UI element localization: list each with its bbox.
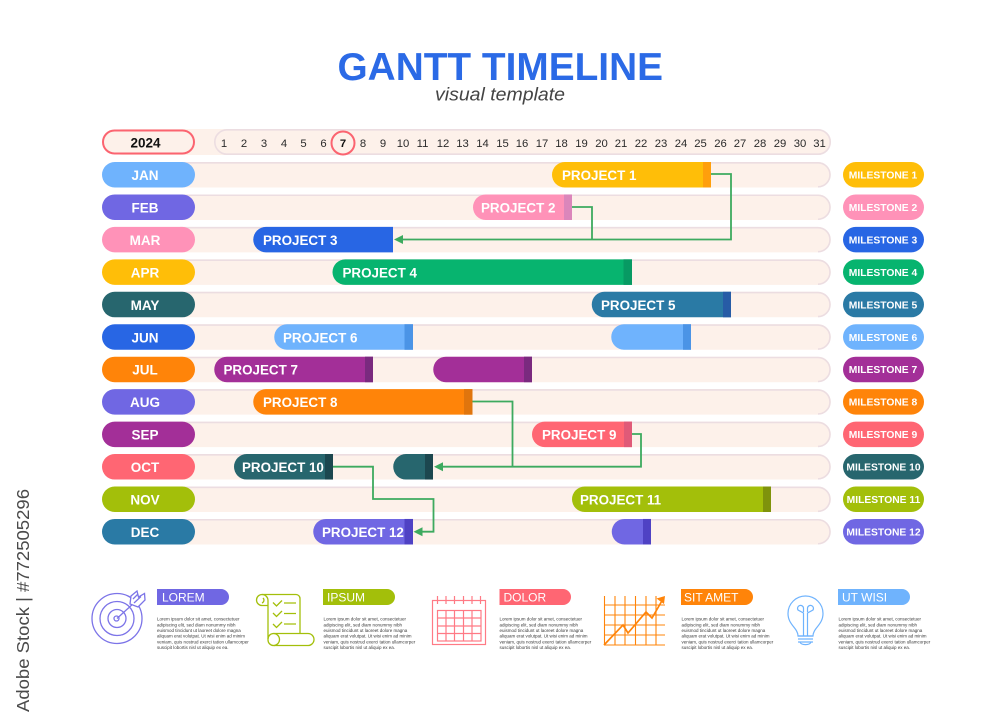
bar: project 12 second phase xyxy=(612,519,651,544)
milestone 8 xyxy=(843,389,924,415)
legend item: Ut Wisi xyxy=(788,589,931,650)
body text: Lorem ipsum dolor sit amet, consectetuer xyxy=(500,617,583,622)
milestone 2 xyxy=(843,194,924,220)
label: LOREM xyxy=(157,589,229,605)
body text: suscipit lobortis nisl ut aliquip ex ea. xyxy=(500,645,571,650)
milestone 6 xyxy=(843,324,924,350)
day scale: 23 xyxy=(655,138,667,150)
row: January xyxy=(102,162,924,188)
body text: adipiscing elit, sed diam nonummy nibh xyxy=(157,622,236,627)
day scale: 14 xyxy=(476,138,489,150)
body text: adipiscing elit, sed diam nonummy nibh xyxy=(500,622,579,627)
day scale: 30 xyxy=(794,138,806,150)
row: June xyxy=(102,324,924,350)
month: OCT xyxy=(102,454,195,480)
legend item: Sit Amet xyxy=(604,589,774,650)
milestone 7: MILESTONE 7 xyxy=(849,365,918,376)
milestone 9 xyxy=(843,422,924,447)
day scale: 24 xyxy=(675,138,687,150)
vertical stock credit: Adobe Stock | #772505296 xyxy=(13,489,33,712)
bar: project 6 second phase xyxy=(611,324,691,350)
day scale: 15 xyxy=(496,138,509,150)
body text: euismod tincidunt ut laoreet dolore magna xyxy=(838,628,923,633)
month: MAY xyxy=(102,292,195,317)
day scale: 10 xyxy=(397,138,409,150)
bar: project 6: PROJECT 6 xyxy=(283,330,357,345)
label: IPSUM xyxy=(323,589,395,605)
bar: project 5 xyxy=(592,292,731,317)
row: February xyxy=(102,194,924,220)
bar: project 7: PROJECT 7 xyxy=(224,363,298,378)
year pill xyxy=(103,130,194,154)
body text: aliquam erat volutpat. Ut wisi enim ad minim xyxy=(324,634,412,639)
title: GANTT TIMELINE xyxy=(338,46,663,89)
bar: project 7 xyxy=(214,357,373,382)
bar: project 10 xyxy=(234,454,333,480)
today marker xyxy=(332,132,354,154)
month: MAR: MAR xyxy=(130,233,161,248)
year pill: 2024 xyxy=(130,136,161,150)
milestone 6: MILESTONE 6 xyxy=(849,333,918,344)
body text: suscipit lobortis nisl ut aliquip ex ea. xyxy=(682,645,753,650)
month: FEB xyxy=(102,194,195,220)
month: APR: APR xyxy=(131,265,159,280)
legend item: Ipsum xyxy=(256,589,416,650)
month: JAN: JAN xyxy=(131,168,159,183)
milestone 12 xyxy=(843,519,924,544)
bar: project 9: PROJECT 9 xyxy=(542,428,616,443)
day scale: 5 xyxy=(300,138,307,150)
month: SEP xyxy=(102,422,195,447)
body text: euismod tincidunt ut laoreet dolore magna xyxy=(157,628,241,633)
icon: growth chart xyxy=(604,596,665,645)
row: May xyxy=(102,292,924,317)
body text: veniam, quis nostrud exerci tation ullamcorper xyxy=(324,639,416,644)
day scale xyxy=(215,130,830,154)
milestone 2: MILESTONE 2 xyxy=(849,203,918,214)
row: October xyxy=(102,454,924,480)
bar: project 1 xyxy=(552,162,711,188)
day scale: 13 xyxy=(456,138,469,150)
row: August xyxy=(102,389,924,415)
body text: adipiscing elit, sed diam nonummy nibh xyxy=(838,622,918,627)
body text: veniam, quis nostrud exerci tation ullamcorper xyxy=(157,639,249,644)
milestone 7 xyxy=(843,357,924,382)
month: DEC: DEC xyxy=(131,525,159,540)
body text: euismod tincidunt ut laoreet dolore magna xyxy=(324,628,408,633)
row: December xyxy=(102,519,924,544)
month: AUG xyxy=(102,389,195,415)
body text: adipiscing elit, sed diam nonummy nibh xyxy=(682,622,761,627)
body text: Lorem ipsum dolor sit amet, consectetuer xyxy=(838,617,922,622)
milestone 12: MILESTONE 12 xyxy=(846,527,921,538)
bar: project 10 second phase xyxy=(393,454,433,480)
day scale: 8 xyxy=(360,138,366,150)
body text: suscipit lobortis nisl ut aliquip ex ea. xyxy=(838,645,910,650)
subtitle: visual template xyxy=(435,84,565,104)
milestone 1 xyxy=(843,162,924,188)
day scale: 9 xyxy=(380,138,386,150)
bar: project 8 xyxy=(253,389,472,415)
arrow: project 8 joins project 10 line xyxy=(472,402,512,466)
milestone 10: MILESTONE 10 xyxy=(846,463,921,474)
body text: suscipit lobortis nisl ut aliquip ex ea. xyxy=(157,645,229,650)
milestone 1: MILESTONE 1 xyxy=(849,170,918,182)
month: JUN xyxy=(102,324,195,350)
bar: project 4 xyxy=(332,259,632,285)
day scale: 19 xyxy=(575,138,588,150)
day scale: 17 xyxy=(536,138,548,150)
bar: project 3: PROJECT 3 xyxy=(263,233,337,248)
label: DOLOR: DOLOR xyxy=(504,590,547,604)
bar: project 8: PROJECT 8 xyxy=(263,395,338,410)
month: JUN: JUN xyxy=(131,330,159,345)
day scale: 16 xyxy=(516,138,528,150)
day scale: 22 xyxy=(635,138,647,150)
day scale: 3 xyxy=(261,138,267,150)
milestone 3 xyxy=(843,227,924,252)
day scale: 7 xyxy=(340,138,346,150)
day scale: 25 xyxy=(694,138,707,150)
body text: euismod tincidunt ut laoreet dolore magna xyxy=(500,628,584,633)
day scale: 21 xyxy=(615,138,627,150)
bar: project 12: PROJECT 12 xyxy=(322,525,404,540)
month: JAN xyxy=(102,162,195,188)
row: March xyxy=(102,227,924,252)
label: UT WISI: UT WISI xyxy=(842,590,887,604)
icon: light bulb xyxy=(788,596,823,645)
month: DEC xyxy=(102,519,195,544)
month: APR xyxy=(102,259,195,285)
bar: project 6 xyxy=(274,324,413,350)
month: NOV xyxy=(102,486,195,512)
row: November xyxy=(102,486,924,512)
day scale: 11 xyxy=(417,138,428,150)
day scale: 2 xyxy=(241,138,247,150)
body text: aliquam erat volutpat. Ut wisi enim ad minim xyxy=(157,634,245,639)
bar: project 11 xyxy=(572,486,771,512)
day scale: 1 xyxy=(221,138,227,150)
month: JUL: JUL xyxy=(132,363,158,378)
bar: project 2: PROJECT 2 xyxy=(481,200,555,215)
milestone 10 xyxy=(843,454,924,480)
bar: project 7 second phase xyxy=(433,357,532,382)
body text: veniam, quis nostrud exerci tation ullamcorper xyxy=(682,639,774,644)
day scale: 4 xyxy=(281,138,287,150)
body text: veniam, quis nostrud exerci tation ullamcorper xyxy=(500,639,592,644)
label: SIT AMET xyxy=(681,589,753,605)
month: MAY: MAY xyxy=(131,298,159,313)
icon: target with arrow xyxy=(92,591,145,644)
body text: Lorem ipsum dolor sit amet, consectetuer xyxy=(682,617,765,622)
day scale: 29 xyxy=(774,138,786,150)
bar: project 5: PROJECT 5 xyxy=(601,298,676,313)
day scale: 12 xyxy=(437,138,449,150)
row: September xyxy=(102,422,924,447)
row: April xyxy=(102,259,924,285)
milestone 8: MILESTONE 8 xyxy=(849,398,918,409)
month: NOV: NOV xyxy=(130,492,160,508)
day scale: 27 xyxy=(734,138,746,150)
label: LOREM: LOREM xyxy=(162,590,205,604)
milestone 4: MILESTONE 4 xyxy=(849,268,918,279)
bar: project 3 xyxy=(253,227,393,252)
day scale: 31 xyxy=(813,138,826,150)
milestone 5 xyxy=(843,292,924,317)
bar: project 12 xyxy=(313,519,413,544)
body text: aliquam erat volutpat. Ut wisi enim ad minim xyxy=(500,634,588,639)
milestone 11: MILESTONE 11 xyxy=(847,495,921,506)
label: IPSUM: IPSUM xyxy=(327,590,365,604)
month: OCT: OCT xyxy=(131,460,160,475)
row: July xyxy=(102,357,924,382)
day scale: 26 xyxy=(714,138,727,150)
milestone 9: MILESTONE 9 xyxy=(849,430,918,441)
milestone 5: MILESTONE 5 xyxy=(849,300,918,311)
arrow: project 10 to project 12 xyxy=(333,467,434,536)
bar: project 11: PROJECT 11 xyxy=(580,492,662,508)
day scale: 6 xyxy=(320,138,327,150)
milestone 3: MILESTONE 3 xyxy=(849,235,918,246)
month: AUG: AUG xyxy=(130,395,160,410)
arrow: project 2 joins project 3 line xyxy=(572,207,592,240)
legend item: Dolor xyxy=(432,589,592,650)
body text: Lorem ipsum dolor sit amet, consectetuer xyxy=(157,617,240,622)
label: UT WISI xyxy=(838,589,910,605)
legend item: Lorem xyxy=(92,589,249,650)
month: JUL xyxy=(102,357,195,382)
milestone 4 xyxy=(843,259,924,285)
body text: euismod tincidunt ut laoreet dolore magna xyxy=(682,628,766,633)
bar: project 4: PROJECT 4 xyxy=(342,265,417,280)
arrow: project 9 to project 10 second phase xyxy=(434,434,641,471)
month: MAR xyxy=(102,227,195,252)
bar: project 2 xyxy=(473,194,572,220)
day scale: 20 xyxy=(595,138,608,150)
bar: project 10: PROJECT 10 xyxy=(242,460,324,475)
header row: year and days xyxy=(103,129,831,155)
label: DOLOR xyxy=(500,589,571,605)
month: SEP: SEP xyxy=(131,428,159,443)
arrow: project 1 to project 3 xyxy=(394,174,731,244)
body text: aliquam erat volutpat. Ut wisi enim ad minim xyxy=(838,634,927,639)
label: SIT AMET: SIT AMET xyxy=(684,590,739,604)
milestone 11 xyxy=(843,486,924,512)
body text: adipiscing elit, sed diam nonummy nibh xyxy=(324,622,403,627)
day scale: 18 xyxy=(555,138,568,150)
bar: project 9 xyxy=(532,422,632,447)
body text: Lorem ipsum dolor sit amet, consectetuer xyxy=(324,617,407,622)
body text: veniam, quis nostrud exerci tation ullamcorper xyxy=(838,639,931,644)
body text: suscipit lobortis nisl ut aliquip ex ea. xyxy=(324,645,395,650)
bar: project 1: PROJECT 1 xyxy=(562,168,637,183)
day scale: 28 xyxy=(754,138,766,150)
icon: checklist scroll xyxy=(256,594,314,646)
month: FEB: FEB xyxy=(132,200,159,215)
body text: aliquam erat volutpat. Ut wisi enim ad minim xyxy=(682,634,770,639)
icon: calendar xyxy=(432,596,486,644)
